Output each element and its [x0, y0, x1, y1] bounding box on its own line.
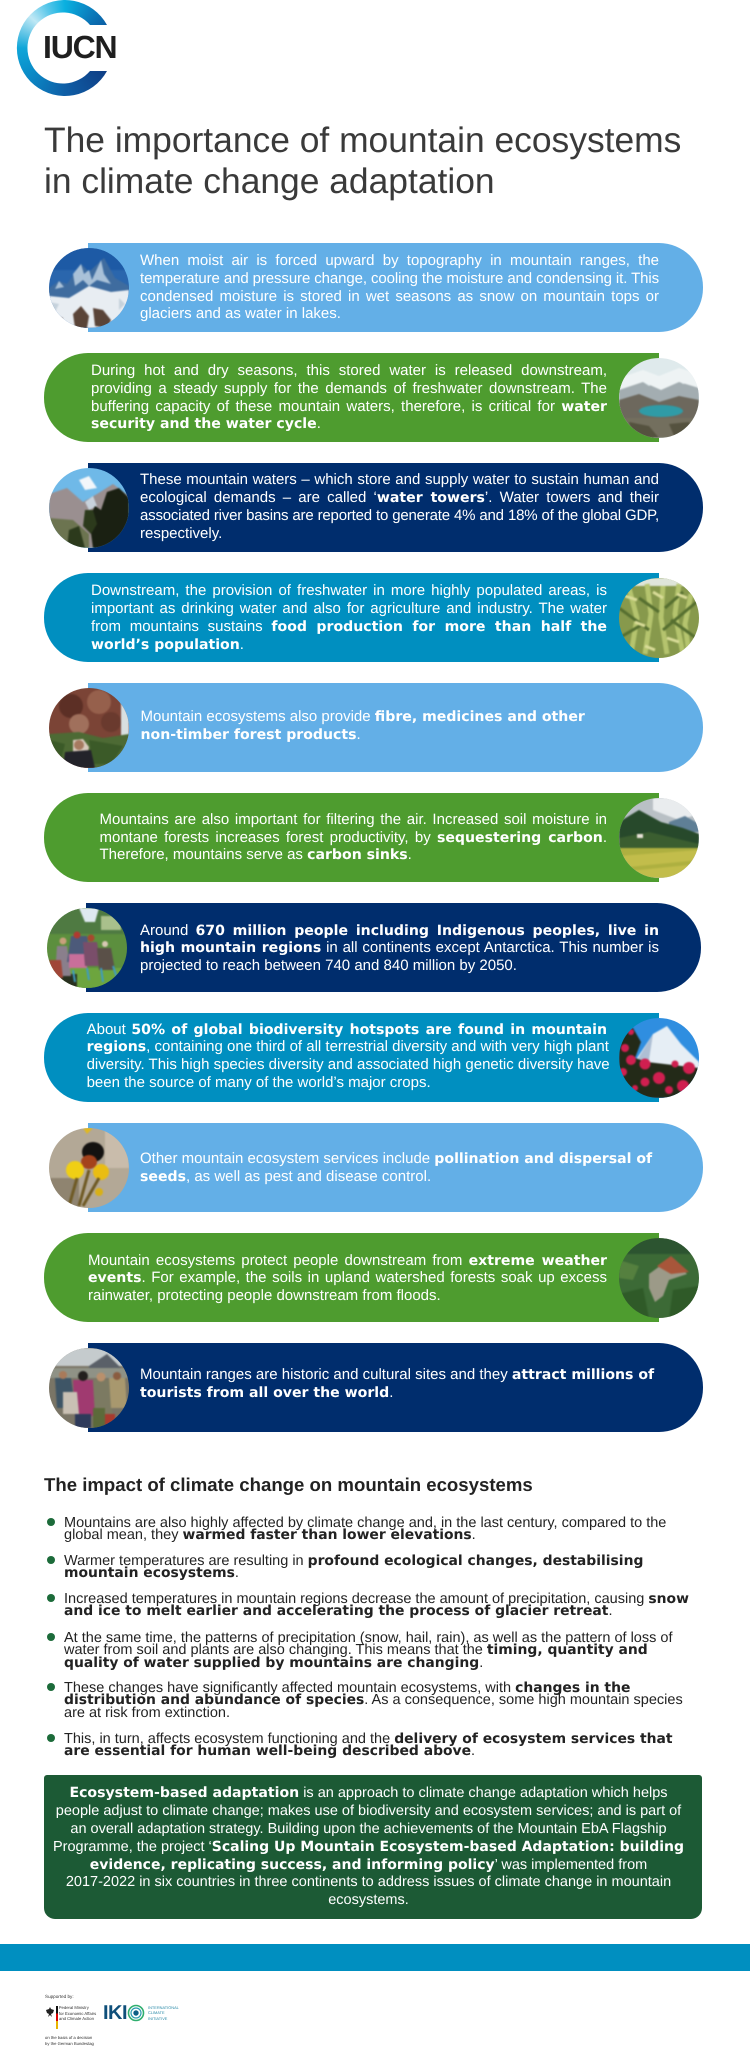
- decision note: by the German Bundestag: [45, 2040, 94, 2046]
- bullet text: species distribution: distribution and abundance of species. As a consequence, some high mountain species: [64, 1692, 683, 1708]
- bullet text: water patterns: water from soil and plants are also changing. This means that the timing, quantity and: [64, 1642, 648, 1658]
- text block: Mountain ecosystems also provide fibre, medicines and other: [140, 708, 585, 725]
- icon: bee on flower photo: [49, 1128, 129, 1208]
- text block: regions, containing one third of all terrestrial diversity and with very high plant: [87, 1038, 609, 1055]
- panel: ecosystem-based adaptation: [44, 1775, 702, 1919]
- decision note: [45, 2035, 94, 2046]
- text block: Around 670 million people including Indigenous peoples, live in: [140, 922, 659, 938]
- bullet text: glacier retreat: Increased temperatures in mountain regions decrease the amount of precipitation, causing snow: [64, 1590, 689, 1606]
- bullet text: species distribution: These changes have significantly affected mountain ecosystems, with changes in the: [64, 1680, 630, 1696]
- logo wordmark: IUCN: [43, 29, 116, 65]
- text block: montane forests increases forest productivity, by sequestering carbon.: [100, 829, 607, 846]
- bullet text: species distribution: [64, 1680, 683, 1721]
- icon: glacial lake photo: [619, 358, 699, 438]
- heading: impact of climate change: The impact of climate change on mountain ecosystems: [44, 1474, 533, 1495]
- callout text: an overall adaptation strategy. Building upon the achievements of the Mountain EbA Flagship: [70, 1821, 667, 1837]
- text block: [140, 1150, 652, 1185]
- text block: non-timber forest products.: [140, 726, 361, 743]
- bullet text: ecological changes: mountain ecosystems.: [64, 1565, 239, 1581]
- panel: carbon sinks: [44, 793, 699, 882]
- bullet text: ecosystem services: This, in turn, affects ecosystem functioning and the delivery of ecosystem services that: [64, 1730, 673, 1746]
- text block: [140, 252, 659, 322]
- text block: About 50% of global biodiversity hotspots are found in mountain: [87, 1020, 607, 1038]
- text block: [140, 471, 659, 542]
- panel: stored water: [44, 353, 699, 442]
- text block: [91, 582, 607, 653]
- text block: Other mountain ecosystem services include pollination and dispersal of: [140, 1150, 652, 1167]
- icon: community meeting photo: [47, 908, 127, 988]
- text block: [140, 922, 659, 974]
- text block: temperature and pressure change, cooling the moisture and condensing it. This: [140, 270, 659, 287]
- icon: german flag bar: [56, 2006, 58, 2029]
- bullet text: warming: global mean, they warmed faster than lower elevations.: [64, 1527, 476, 1543]
- text block: important as drinking water and also for agriculture and industry. The water: [91, 600, 607, 617]
- text block: [140, 708, 585, 743]
- bullet text: glacier retreat: and ice to melt earlier and accelerating the process of glacier retreat.: [64, 1603, 612, 1619]
- callout text: 2017-2022 in six countries in three continents to address issues of climate change in mountain: [66, 1874, 671, 1890]
- text block: from mountains sustains food production for more than half the: [91, 618, 607, 635]
- text block: [100, 811, 607, 863]
- icon: snowy mountain photo: [49, 248, 129, 328]
- panel: downstream freshwater: [44, 573, 699, 662]
- text block: These mountain waters – which store and supply water to sustain human and: [140, 471, 659, 488]
- text block: Mountains are also important for filtering the air. Increased soil moisture in: [100, 811, 607, 828]
- text block: Therefore, mountains serve as carbon sinks.: [100, 846, 412, 863]
- text block: events. For example, the soils in upland watershed forests soak up excess: [88, 1269, 607, 1286]
- decision note: on the basis of a decision: [45, 2035, 92, 2040]
- text block: seeds, as well as pest and disease control.: [140, 1168, 431, 1185]
- text block: condensed moisture is stored in wet seasons as snow on mountain tops or: [140, 288, 659, 305]
- callout text: Ecosystem-based adaptation is an approach to climate change adaptation which helps: [69, 1785, 668, 1801]
- logo: IUCN: [16, 0, 116, 96]
- text block: providing a steady supply for the demands of freshwater downstream. The: [91, 380, 607, 397]
- panel: biodiversity hotspots: [44, 1013, 699, 1102]
- icon: forested valley photo: [49, 468, 129, 548]
- text block: been the source of many of the world’s major crops.: [87, 1074, 431, 1091]
- text block: rainwater, protecting people downstream from floods.: [88, 1287, 441, 1304]
- title: [44, 120, 681, 200]
- icon: rhododendron and peak photo: [619, 1018, 699, 1098]
- icon: IKI rings: [127, 2004, 145, 2022]
- icon: rice field photo: [619, 798, 699, 878]
- panel: tourism: [49, 1343, 703, 1432]
- callout text: evidence, replicating success, and informing policy’ was implemented from: [90, 1857, 647, 1873]
- bullet list: impacts: [47, 1514, 689, 1759]
- bullet text: water patterns: quality of water supplied by mountains are changing.: [64, 1655, 483, 1671]
- text block: [88, 1252, 607, 1304]
- text block: glaciers and as water in lakes.: [140, 305, 341, 322]
- bullet text: ecosystem services: are essential for human well-being described above.: [64, 1743, 475, 1759]
- title: The importance of mountain ecosystems: [44, 120, 681, 160]
- footer: supporter logos: [44, 1992, 184, 2048]
- bullet text: water patterns: [64, 1630, 673, 1671]
- icon: federal eagle: [46, 2007, 54, 2018]
- panel: pollination: [49, 1123, 703, 1212]
- text block: high mountain regions in all continents except Antarctica. This number is: [140, 939, 659, 956]
- bullet text: warming: Mountains are also highly affected by climate change and, in the last century, compared to the: [64, 1514, 666, 1530]
- text block: buffering capacity of these mountain waters, therefore, is critical for water: [91, 398, 607, 415]
- text block: During hot and dry seasons, this stored water is released downstream,: [91, 362, 607, 379]
- bullet text: glacier retreat: [64, 1590, 689, 1619]
- IKI name: [148, 2005, 179, 2021]
- bullet text: ecological changes: Warmer temperatures are resulting in profound ecological changes, destabilising: [64, 1552, 643, 1568]
- bullet text: species distribution: are at risk from extinction.: [64, 1705, 230, 1721]
- title: in climate change adaptation: [44, 160, 495, 200]
- text block: diversity. This high species diversity and associated high genetic diversity have: [87, 1056, 610, 1073]
- text block: [140, 1366, 654, 1401]
- ministry name: and Climate Action: [59, 2016, 94, 2021]
- callout text: [44, 1785, 693, 1910]
- text block: world’s population.: [91, 636, 244, 653]
- ministry name: for Economic Affairs: [59, 2011, 96, 2016]
- text block: associated river basins are reported to generate 4% and 18% of the global GDP,: [140, 507, 659, 524]
- supported by label: Supported by:: [45, 1994, 74, 1999]
- panel: moist air: [49, 243, 703, 332]
- text block: ecological demands – are called ‘water towers’. Water towers and their: [140, 489, 659, 506]
- bullet text: water patterns: At the same time, the patterns of precipitation (snow, hail, rain), as well as the pattern of loss of: [64, 1630, 672, 1646]
- icon: maize crop photo: [619, 578, 699, 658]
- text block: When moist air is forced upward by topography in mountain ranges, the: [140, 252, 659, 269]
- text block: projected to reach between 740 and 840 million by 2050.: [140, 957, 517, 974]
- IKI name: INTERNATIONAL: [148, 2005, 179, 2010]
- panel: water towers: [49, 463, 703, 552]
- logo ring: [16, 0, 107, 96]
- icon: tourist crowd photo: [49, 1348, 129, 1428]
- text block: Mountain ranges are historic and cultural sites and they attract millions of: [140, 1366, 654, 1383]
- text block: Downstream, the provision of freshwater in more highly populated areas, is: [91, 582, 607, 599]
- bullet text: ecological changes: [64, 1552, 643, 1581]
- bullet text: ecosystem services: [64, 1732, 673, 1758]
- text block: Mountain ecosystems protect people downstream from extreme weather: [88, 1252, 607, 1268]
- text block: tourists from all over the world.: [140, 1384, 393, 1401]
- panel: fibre and medicines: [49, 683, 703, 772]
- IKI wordmark: IKI: [103, 2002, 127, 2024]
- ministry name: Federal Ministry: [59, 2005, 89, 2010]
- callout text: Programme, the project ‘Scaling Up Mountain Ecosystem-based Adaptation: building: [53, 1839, 684, 1855]
- text block: respectively.: [140, 525, 222, 542]
- icon: forest products photo: [49, 688, 129, 768]
- footer band: [0, 1944, 750, 1971]
- callout text: ecosystems.: [328, 1892, 409, 1908]
- callout text: people adjust to climate change; makes use of biodiversity and ecosystem services; and is part of: [56, 1803, 681, 1819]
- bullet text: warming: [64, 1514, 666, 1543]
- IKI name: CLIMATE: [148, 2010, 165, 2015]
- text block: [86, 1020, 610, 1091]
- panel: extreme weather: [44, 1233, 699, 1322]
- text block: [91, 362, 607, 432]
- panel: people in mountains: [47, 903, 701, 992]
- icon: eroded hillside photo: [619, 1238, 699, 1318]
- text block: security and the water cycle.: [91, 415, 321, 432]
- IKI name: INITIATIVE: [148, 2016, 167, 2021]
- ministry name: [59, 2005, 96, 2022]
